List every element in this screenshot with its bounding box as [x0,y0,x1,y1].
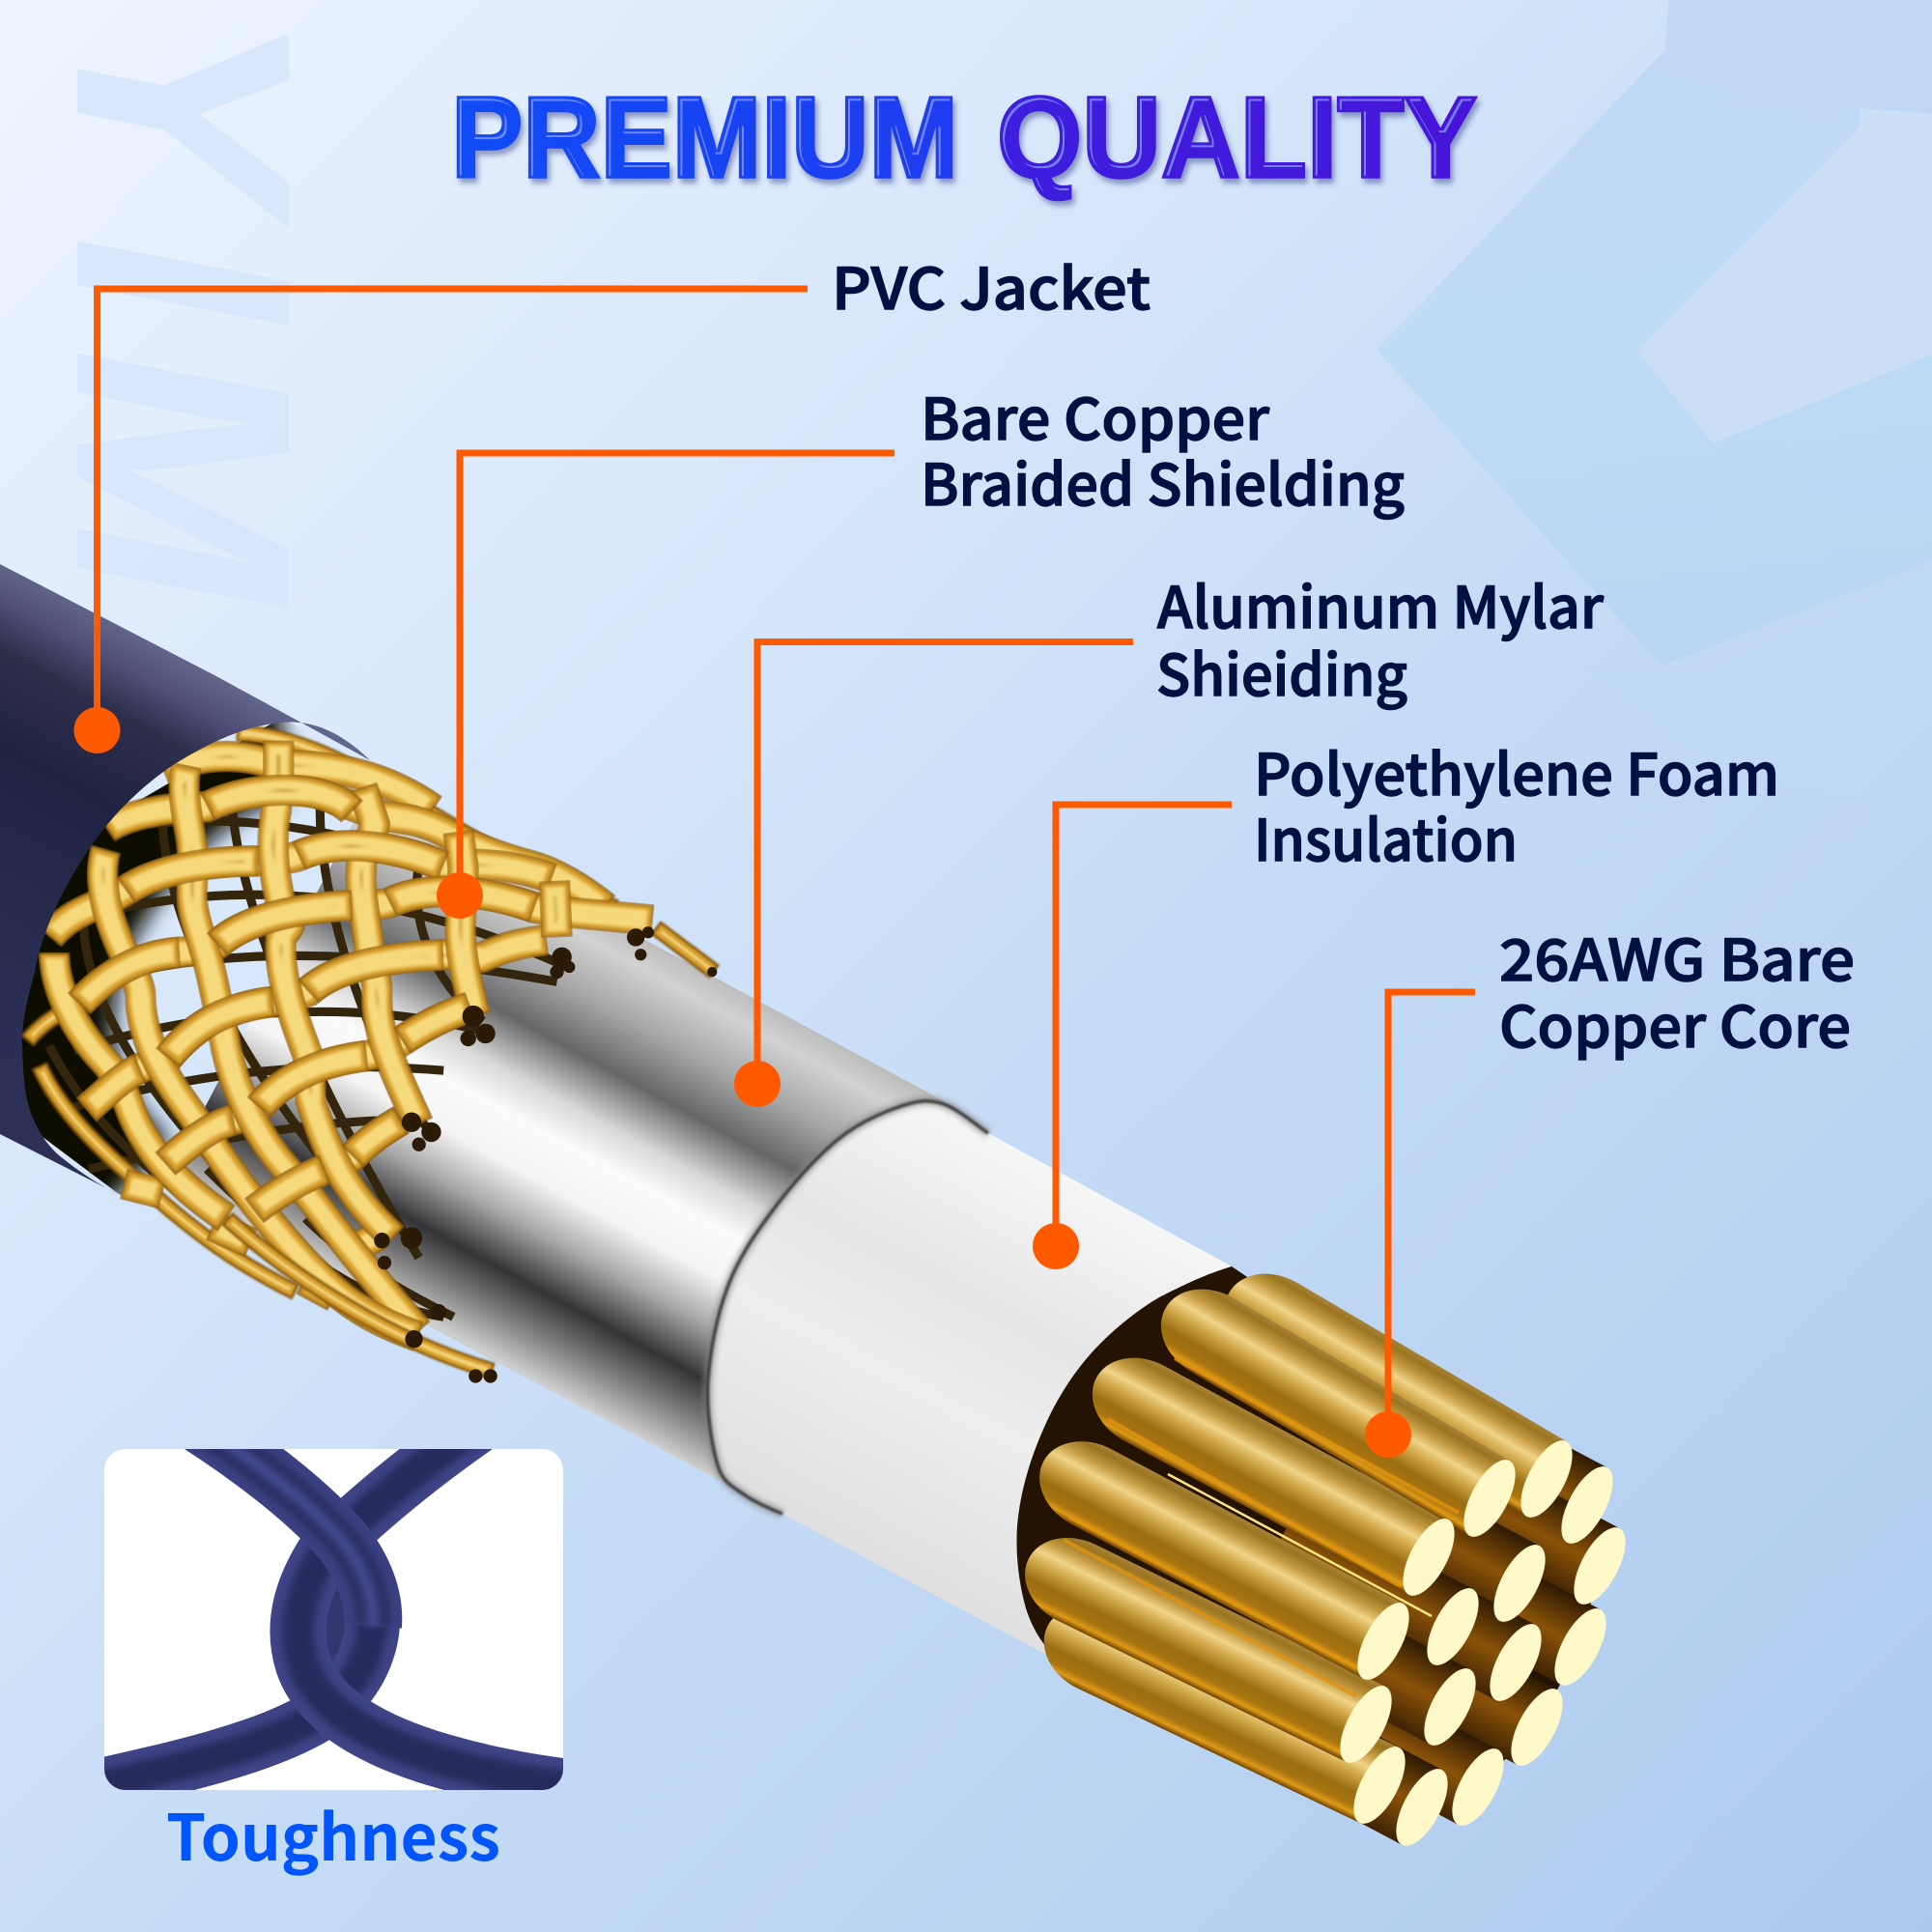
title [451,73,1477,202]
panel background [104,1449,563,1790]
seam soft shadow [708,1101,988,1514]
callout: PVC Jacket [73,243,1151,753]
callout: PVC Jacket: PVC Jacket [832,243,1151,326]
cable illustration [0,564,1635,1854]
background lower chevron shape [1584,570,1932,821]
braid inner shadow [40,723,281,1194]
copper strand end faces [1330,1433,1635,1854]
polyethylene foam white layer [708,1101,1232,1663]
braid outline strands [27,733,715,1293]
braid long cross strands [49,756,653,1297]
braid cut strand tips [374,926,717,1383]
braid under wires [49,800,567,1326]
seam ring [708,1101,988,1514]
toughness label: Toughness [166,1787,500,1880]
strand bright line [1168,1474,1432,1616]
knot center fill [327,1588,346,1662]
braid long running strands [54,740,557,1371]
callout: Bare Copper Braided Shielding: Braided Shielding [921,440,1405,522]
copper core [1009,1256,1635,1854]
background inner chevron shape [1637,108,1932,443]
strand A [298,1427,577,1787]
callout: Polyethylene Foam Insulation: Insulation [1254,795,1518,877]
callout: 26AWG Bare Copper Core [1365,915,1855,1458]
rear copper strands [1260,1377,1620,1845]
callout: 26AWG Bare Copper Core: Copper Core [1499,981,1851,1064]
title: QUALITY [997,73,1477,202]
braid over-crossing pieces [79,790,535,1211]
callout: Polyethylene Foam Insulation [1033,729,1779,1269]
strand B lower [91,1620,373,1787]
callout: Bare Copper Braided Shielding [437,374,1405,919]
callout: Aluminum Mylar Shieiding [734,562,1605,1107]
callout: Bare Copper Braided Shielding: Bare Copper [921,374,1270,456]
aluminum mylar silver layer [164,791,988,1514]
copper braid [27,723,717,1383]
panel: toughness [104,1449,563,1876]
core cavity [1016,1266,1600,1807]
callout: Aluminum Mylar Shieiding: Aluminum Mylar [1157,562,1605,644]
callout: 26AWG Bare Copper Core: 26AWG Bare [1499,915,1855,997]
front copper strands [1009,1256,1568,1824]
callout: Aluminum Mylar Shieiding: Shieiding [1156,630,1407,712]
strand B upper [197,1423,373,1626]
strand reflection lines [1064,1358,1459,1696]
pvc jacket [0,564,370,1194]
callout: Polyethylene Foam Insulation: Polyethylene Foam [1254,729,1779,811]
title: PREMIUM [451,73,958,202]
background chevron shape [1377,0,1932,666]
icon: twisted cable knot [104,1449,563,1790]
